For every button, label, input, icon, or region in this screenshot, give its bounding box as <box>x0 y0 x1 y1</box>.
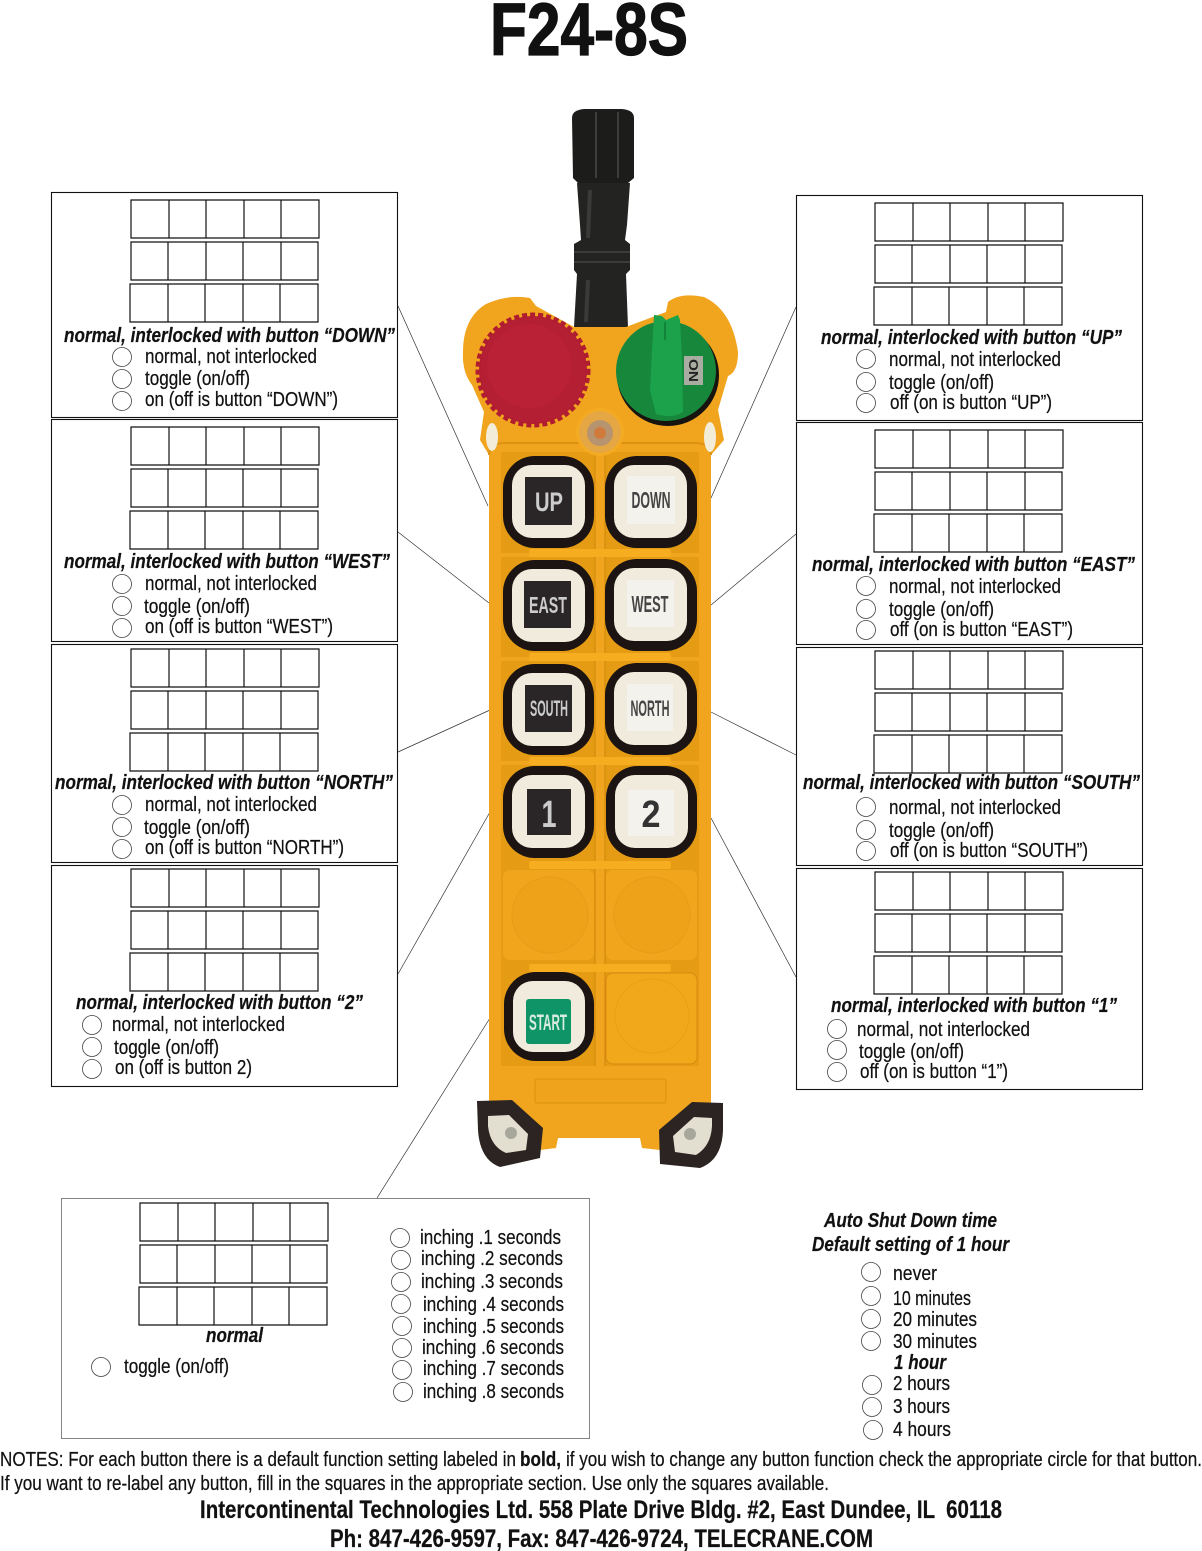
button SOUTH <box>503 664 594 755</box>
time options: 3 hours <box>893 1396 950 1418</box>
options: toggle (on/off) <box>889 599 994 621</box>
label squares <box>874 651 1063 773</box>
time options: 20 minutes <box>893 1309 977 1331</box>
time options: never <box>893 1263 937 1285</box>
panel: START button <box>62 1198 590 1438</box>
options: normal, not interlocked <box>889 349 1061 371</box>
blank plate left <box>503 870 594 960</box>
blank plate lower right <box>606 973 697 1064</box>
button SOUTH: SOUTH <box>530 696 568 721</box>
notes: bold, <box>520 1449 561 1471</box>
button 1: 1 <box>542 794 556 836</box>
inching options: inching .1 seconds <box>420 1227 561 1249</box>
options: toggle (on/off) <box>114 1037 219 1059</box>
options: on (off is button “WEST”) <box>145 616 333 638</box>
options <box>828 1019 1030 1083</box>
options: on (off is button “NORTH”) <box>145 837 344 859</box>
inching options: inching .8 seconds <box>423 1381 564 1403</box>
notes: If you want to re-label any button, fill in the squares in the appropriate section. Use only the squares available. <box>0 1473 829 1495</box>
default setting: normal, interlocked with button “1” <box>831 995 1117 1017</box>
heading: Auto Shut Down time <box>823 1210 997 1232</box>
options: normal, not interlocked <box>145 346 317 368</box>
leader lines from panels to buttons <box>377 306 796 1198</box>
label squares <box>130 869 319 991</box>
green key switch <box>616 315 719 426</box>
options: toggle (on/off) <box>144 817 250 839</box>
button DOWN: DOWN <box>632 487 670 513</box>
panel: button DOWN <box>52 192 398 418</box>
time options: 1 hour <box>894 1352 947 1374</box>
button DOWN <box>605 456 697 548</box>
green key switch: ON <box>686 359 701 382</box>
options: toggle (on/off) <box>889 820 994 842</box>
right foot <box>659 1102 723 1168</box>
red emergency stop button <box>478 315 588 425</box>
inching options: inching .2 seconds <box>421 1248 563 1270</box>
antenna <box>572 109 634 327</box>
label squares <box>130 200 319 322</box>
options: toggle (on/off) <box>145 368 250 390</box>
options <box>856 797 1088 862</box>
button WEST: WEST <box>632 591 668 617</box>
panel: button UP <box>796 196 1142 420</box>
inching options <box>390 1227 564 1403</box>
default setting: normal, interlocked with button “UP” <box>821 327 1122 349</box>
left foot <box>477 1100 543 1167</box>
heading: Default setting of 1 hour <box>812 1234 1010 1256</box>
default setting: normal, interlocked with button “SOUTH” <box>803 772 1140 794</box>
options: normal, not interlocked <box>889 797 1061 819</box>
options: off (on is button “1”) <box>860 1061 1008 1083</box>
label squares <box>130 427 319 549</box>
panel: button 1 <box>796 868 1142 1090</box>
time options: 30 minutes <box>893 1331 977 1353</box>
button START <box>504 972 594 1061</box>
heading <box>812 1210 1010 1256</box>
options: toggle (on/off) <box>859 1041 964 1063</box>
panel: button SOUTH <box>796 648 1142 866</box>
time options: 2 hours <box>893 1373 950 1395</box>
remote control pendant photo <box>463 109 738 1168</box>
panel: button 2 <box>52 866 398 1086</box>
inching options: inching .6 seconds <box>422 1337 564 1359</box>
notes: NOTES: For each button there is a default function setting labeled in <box>0 1449 516 1471</box>
options <box>82 1014 285 1079</box>
time options: 4 hours <box>893 1419 951 1441</box>
options: toggle (on/off) <box>889 372 994 394</box>
options: normal, not interlocked <box>889 576 1061 598</box>
toggle option: toggle (on/off) <box>124 1356 229 1378</box>
inching options: inching .4 seconds <box>423 1294 564 1316</box>
button 2 <box>606 766 697 858</box>
button WEST <box>605 559 697 651</box>
options <box>112 794 344 859</box>
button EAST <box>503 560 594 651</box>
default setting: normal, interlocked with button “NORTH” <box>55 772 393 794</box>
time options <box>862 1262 977 1441</box>
button UP: UP <box>535 487 563 517</box>
button START: START <box>529 1010 567 1035</box>
time options: 10 minutes <box>893 1288 971 1310</box>
button UP <box>503 456 594 548</box>
button NORTH: NORTH <box>630 696 670 721</box>
button EAST: EAST <box>529 592 567 618</box>
default setting: normal <box>206 1325 263 1347</box>
panel: button NORTH <box>52 644 398 862</box>
yellow body <box>463 295 738 1150</box>
inching options: inching .7 seconds <box>423 1358 564 1380</box>
button 2: 2 <box>642 794 660 836</box>
panel: button WEST <box>52 420 398 642</box>
company contact footer: Intercontinental Technologies Ltd. 558 Plate Drive Bldg. #2, East Dundee, IL 60118 <box>200 1496 1002 1524</box>
default setting: normal, interlocked with button “WEST” <box>64 551 390 573</box>
options: normal, not interlocked <box>857 1019 1030 1041</box>
company contact footer <box>200 1496 1002 1551</box>
options: on (off is button “DOWN”) <box>145 389 338 411</box>
options: normal, not interlocked <box>112 1014 285 1036</box>
panel: button EAST <box>796 422 1142 644</box>
label squares <box>874 430 1063 552</box>
button NORTH <box>605 663 697 755</box>
button 1 <box>503 766 594 858</box>
status light <box>576 408 624 456</box>
label squares <box>139 1203 328 1325</box>
options: off (on is button “EAST”) <box>890 619 1073 641</box>
default setting: normal, interlocked with button “2” <box>76 992 363 1014</box>
options: on (off is button 2) <box>115 1057 252 1079</box>
label squares <box>874 203 1063 325</box>
options: normal, not interlocked <box>145 794 317 816</box>
options <box>112 573 333 638</box>
options: normal, not interlocked <box>145 573 317 595</box>
inching options: inching .3 seconds <box>421 1271 563 1293</box>
options <box>856 576 1073 641</box>
options: toggle (on/off) <box>144 596 250 618</box>
options: off (on is button “SOUTH”) <box>890 840 1088 862</box>
options <box>112 346 338 411</box>
notes <box>0 1449 1202 1495</box>
label squares <box>130 649 319 771</box>
auto shut down settings <box>812 1210 1010 1441</box>
toggle option <box>92 1356 229 1378</box>
options <box>856 349 1061 414</box>
default setting: normal, interlocked with button “EAST” <box>812 554 1135 576</box>
blank plate right <box>606 870 697 960</box>
options: off (on is button “UP”) <box>890 392 1052 414</box>
label squares <box>874 872 1063 994</box>
inching options: inching .5 seconds <box>423 1316 564 1338</box>
default setting: normal, interlocked with button “DOWN” <box>64 325 395 347</box>
